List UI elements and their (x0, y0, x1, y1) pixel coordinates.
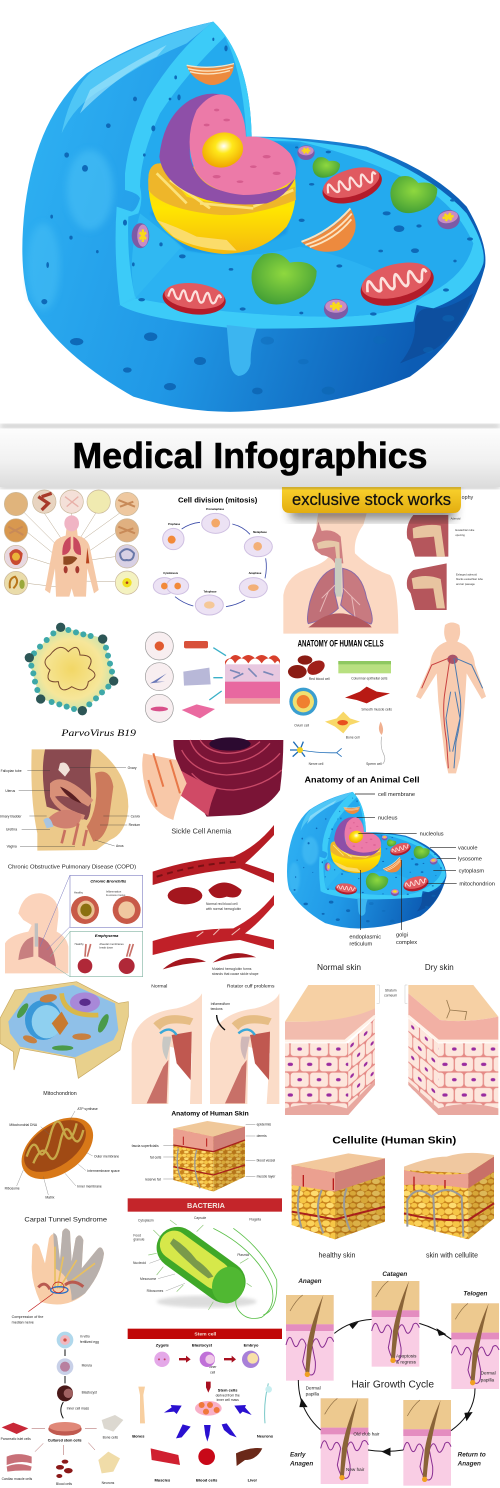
panel: hair growth cycle: papilla (306, 1391, 320, 1396)
labels: bacteria structures: Nucleoid (133, 1261, 146, 1265)
panel: anatomy of human cells: Ovum cell (294, 724, 309, 728)
banner: stem cell (128, 1329, 282, 1339)
panel: hair growth cycle (286, 1271, 499, 1486)
panel: bacteria: Flagella (249, 1218, 261, 1222)
heading: carpal tunnel: Carpal Tunnel Syndrome (24, 1217, 108, 1224)
panel: anatomy of an animal cell: complex (396, 940, 417, 946)
panel: stem cell flowchart left: Cultured stem cells (48, 1438, 82, 1442)
panel: anatomy of human cells (288, 639, 392, 739)
panel: stem cell diagram: Bones (132, 1434, 145, 1439)
panel: endoplasmic reticulum (142, 737, 283, 836)
heading: cell division: Cell division (mitosis) (178, 495, 258, 504)
hair panel: return to anagen (403, 1400, 451, 1486)
hair panel: anagen (286, 1295, 334, 1381)
panel: sickle cell blood vessels: Normal red blood cell (206, 902, 238, 906)
panel: female reproductive anatomy: Rectum (129, 823, 140, 827)
panel: nerve and sperm cells: Sperm cell (366, 762, 382, 766)
heading: COPD: Chronic Obstructive Pulmonary Disease (COPD) (8, 865, 136, 871)
panel: anatomy of human cells: Bone cell (346, 735, 360, 739)
panel: tissue types (145, 632, 280, 722)
panel: cell division mitosis cycle: Telophase (204, 590, 217, 594)
panel: stem cell diagram: Blastocyst (192, 1343, 213, 1348)
panel: normal and dry skin: Stratum (385, 988, 397, 992)
panel: bacteria: Food (133, 1234, 141, 1238)
panel: sickle cell blood vessels: with normal hemoglobin (206, 907, 241, 911)
panel: stem cell diagram: Inner (209, 1365, 217, 1369)
title text: Medical Infographics (72, 435, 428, 476)
panel: anatomy of human skin block: fat cells (150, 1155, 162, 1159)
panel: anatomy of human skin block (132, 1110, 276, 1192)
cycle arrows (298, 1319, 475, 1455)
panel: parvovirus B19 (25, 623, 136, 739)
panel: anatomy of human skin block: blood vessel (257, 1159, 275, 1163)
hair panel: early anagen (321, 1398, 368, 1484)
heading: human skin: Anatomy of Human Skin (171, 1110, 249, 1117)
panel: stem cell flowchart left: Bone cells (103, 1435, 118, 1439)
icon: head profiles with eustachian tube: Adenoid (451, 516, 461, 520)
panel: female reproductive anatomy (0, 749, 140, 851)
panel: cell division mitosis cycle (153, 495, 272, 615)
panel: anatomy of human skin block: epidermis (257, 1122, 271, 1126)
panel: bacteria: Cytoplasm (138, 1219, 154, 1223)
panel: normal and dry skin: Normal skin (317, 963, 361, 972)
exclusive stock works tag: exclusive stock works (292, 490, 451, 509)
panel: hair growth cycle: Old club hair (353, 1431, 380, 1436)
panel: COPD: Emphysema (95, 933, 119, 938)
panel: female reproductive anatomy: Urethra (6, 828, 17, 832)
panel: nerve and sperm cells: Nerve cell (309, 762, 324, 766)
panel: mitochondrion diagram: Outer membrane (94, 1154, 119, 1158)
panel: female reproductive anatomy: Ovary (128, 766, 137, 770)
title banner (0, 424, 500, 520)
panel: rotator cuff shoulders: tendons (211, 1007, 223, 1011)
panel: hair growth cycle: Early (290, 1451, 306, 1458)
panel: organ tissues diagram (4, 490, 139, 597)
panel: COPD: Healthy (75, 942, 84, 946)
panel: COPD: & excess mucus (106, 893, 126, 897)
panel: stem cell flowchart left (1, 1332, 123, 1486)
panel: mitochondrion diagram: Ribosome (5, 1186, 20, 1190)
panel: female reproductive anatomy: Cervix (131, 814, 140, 818)
hair panel: catagen (372, 1281, 419, 1367)
panel: rotator cuff shoulders: Normal (151, 984, 167, 990)
panel: female reproductive anatomy: Fallopian tube (1, 769, 22, 773)
icon: head profiles with eustachian tube: and air passage (456, 582, 475, 586)
panel: stem cell flowchart left: Inner cell mass (67, 1407, 89, 1411)
icon: head profiles with eustachian tube (407, 495, 484, 610)
caption: healthy skin and skin with cellulite (319, 1253, 478, 1260)
panel: respiratory system lungs (283, 513, 398, 634)
panel: normal and dry skin: corneum (384, 994, 397, 998)
panel: COPD: Inflammation (106, 890, 122, 894)
panel: hair growth cycle: Dermal (481, 1371, 496, 1376)
panel: bacteria (128, 1198, 282, 1319)
icon: head profiles with eustachian tube: Enlarged adenoid (456, 572, 477, 576)
panel: COPD: break down (99, 945, 114, 949)
panel: stem cell diagram: derived from the (216, 1393, 240, 1397)
panel: hair growth cycle: New hair (346, 1467, 365, 1472)
panel: cell division mitosis cycle: Anaphase (249, 571, 262, 575)
panel: stem cell diagram: Liver (248, 1478, 258, 1483)
panel: sickle cell blood vessels (153, 825, 274, 976)
panel: rotator cuff shoulders (132, 984, 279, 1104)
panel: mitochondrion diagram (5, 1105, 120, 1200)
caption: healthy skin and skin with cellulite: skin with cellulite (426, 1253, 478, 1260)
panel: vascular body figure (416, 622, 486, 773)
panel: female reproductive anatomy: Uterus (5, 789, 15, 793)
panel: bacteria: BACTERIA (187, 1201, 226, 1210)
labels: bacteria structures: Plasmid (237, 1253, 249, 1257)
heading: cellulite: Cellulite (Human Skin) (332, 1136, 456, 1147)
panel: hair growth cycle: Anagen (457, 1461, 481, 1468)
panel: COPD (5, 865, 143, 977)
panel: normal and dry skin: Dry skin (425, 963, 454, 972)
heading: anatomy of human cells: ANATOMY OF HUMAN CELLS (298, 639, 384, 649)
panel: stem cell flowchart left: Cardiac muscle cells (2, 1477, 33, 1481)
panel: cell division mitosis cycle: Cytokinesis (163, 571, 179, 575)
panel: anatomy of human cells: Columnar epithelial cells (351, 676, 388, 680)
panel: anatomy of an animal cell: cell membrane (378, 792, 415, 798)
heading: animal cell: Anatomy of an Animal Cell (304, 774, 419, 784)
panel: stem cell flowchart left: Neurons (102, 1481, 115, 1485)
panel: rotator cuff shoulders: Rotator cuff problems (227, 984, 275, 990)
caption: sickle cell anemia: Sickle Cell Anemia (171, 827, 232, 836)
labels: bacteria structures: Mesosome (140, 1277, 156, 1281)
panel: mitochondrion diagram: ATP synthase (77, 1107, 98, 1111)
panel: stem cell diagram: Embryo (244, 1343, 259, 1348)
panel: hair growth cycle: papilla (481, 1377, 495, 1382)
panel: anatomy of an animal cell: cytoplasm (459, 869, 484, 875)
panel: cell division mitosis cycle: Metaphase (253, 530, 267, 534)
panel: anatomy of an animal cell: mitochondrion (459, 881, 495, 887)
panel: stem cell diagram: inner cell mass (217, 1398, 239, 1402)
panel: rotator cuff shoulders: Inflamed/torn (211, 1002, 230, 1006)
icon: head profiles with eustachian tube: opening (455, 533, 465, 537)
panel: female reproductive anatomy: Vagina (7, 845, 17, 849)
panel: hair growth cycle: Catagen (382, 1271, 407, 1278)
icon: head profiles with eustachian tube: blocks eustachian tube (456, 577, 484, 581)
panel: bacteria: Capsule (194, 1216, 206, 1220)
panel: hair growth cycle: Anagen (297, 1278, 322, 1285)
panel: bacteria: granule (133, 1238, 145, 1242)
panel: anatomy of human skin block: reserve fat (145, 1177, 161, 1181)
panel: carpal tunnel syndrome: Compression of the (12, 1315, 43, 1319)
panel: anatomy of human skin block: fascia superficialis (132, 1144, 159, 1148)
panel: hair growth cycle: Dermal (306, 1385, 321, 1390)
panel: stem cell diagram (128, 1329, 282, 1483)
panel: cell division mitosis cycle: Prometaphase (206, 507, 225, 511)
caption: healthy skin and skin with cellulite: healthy skin (319, 1253, 356, 1260)
panel: mitochondrion diagram: Intermembrane space (87, 1169, 120, 1173)
panel: mitochondrion diagram: Mitochondrial DNA (9, 1123, 38, 1127)
panel: stem cell flowchart left: in vitro (80, 1334, 90, 1338)
panel: nerve and sperm cells (290, 737, 385, 766)
labels: bacteria structures: Ribosomes (147, 1289, 164, 1293)
panel: anatomy of an animal cell: reticulum (349, 942, 373, 948)
panel: stem cell flowchart left: Pancreatic islet cells (1, 1437, 31, 1441)
panel: stem cell flowchart left: Blastocyst (82, 1391, 97, 1395)
panel: hair growth cycle: & regress (396, 1359, 417, 1364)
panel: stem cell flowchart left: Blood cells (56, 1482, 72, 1486)
panel: anatomy of human skin block: muscle layer (257, 1175, 276, 1179)
panel: anatomy of an animal cell: nucleolus (420, 831, 444, 837)
panel: anatomy of human cells: Smooth muscle cells (361, 707, 392, 711)
icon: head profiles with eustachian tube: ophy (462, 495, 474, 501)
panel: anatomy of an animal cell: nucleus (378, 815, 398, 821)
panel: sickle cell blood vessels: strands that cause sickle shape (212, 972, 259, 976)
panel: anatomy of an animal cell: endoplasmic (349, 934, 381, 940)
panel: COPD: Healthy (74, 890, 84, 894)
panel: anatomy of an animal cell: lysosome (458, 857, 482, 863)
panel: anatomy of an animal cell (287, 774, 495, 948)
panel: stem cell flowchart left: Morula (82, 1364, 92, 1368)
panel: stem cell diagram: cell (210, 1370, 215, 1374)
panel: anatomy of human skin block: dermis (257, 1134, 267, 1138)
panel: anatomy of human cells: Red blood cell (309, 677, 330, 681)
caption: mitochondrion: Mitochondrion (43, 1091, 77, 1097)
heading: hair growth cycle: Hair Growth Cycle (351, 1379, 434, 1390)
panel: hair growth cycle: Apoptosis (396, 1353, 417, 1358)
panel: sickle cell blood vessels: Mutated hemoglobin forms (212, 967, 252, 971)
icon: head profiles with eustachian tube: Eustachian tube (455, 528, 475, 532)
exclusive stock works tag (282, 480, 461, 520)
panel: stem cell diagram: Stem cells (218, 1388, 238, 1393)
panel: anatomy of an animal cell: vacuole (458, 846, 477, 852)
labels: bacteria structures (133, 1253, 249, 1293)
hair panel: telogen (451, 1303, 499, 1389)
panel: stem cell diagram: Muscles (154, 1478, 171, 1483)
panel: normal and dry skin (285, 963, 498, 1115)
hero illustration: animal cell cross-section (22, 22, 485, 412)
panel: mitochondrion diagram: Matrix (45, 1196, 55, 1200)
panel: hair growth cycle: Telogen (463, 1291, 487, 1298)
panel: cell division mitosis cycle: Prophase (168, 522, 181, 526)
panel: stem cell diagram: Zygote (156, 1343, 170, 1348)
panel: stem cell diagram: Blood cells (196, 1478, 218, 1483)
caption: parvovirus: ParvoVirus B19 (60, 729, 136, 739)
banner: bacteria (128, 1198, 282, 1212)
panel: stem cell flowchart left: fertilized egg (80, 1340, 99, 1344)
panel: hair growth cycle: Anagen (289, 1461, 313, 1468)
panel: carpal tunnel syndrome: median nerve (12, 1321, 34, 1325)
panel: carpal tunnel syndrome (12, 1217, 108, 1325)
panel: COPD: Chronic Bronchitis (90, 879, 127, 884)
panel: stem cell diagram: Neurons (257, 1434, 274, 1439)
panel: plant cell (0, 982, 128, 1097)
panel: mitochondrion diagram: Inner membrane (77, 1184, 102, 1188)
panel: stem cell diagram: Stem cell (194, 1331, 217, 1337)
panel: anatomy of an animal cell: golgi (396, 933, 408, 939)
panel: female reproductive anatomy: Anus (116, 844, 124, 848)
panel: COPD: Alveolar membranes (99, 942, 124, 946)
panel: cellulite human skin (292, 1136, 494, 1239)
panel: hair growth cycle: Return to (458, 1451, 486, 1458)
